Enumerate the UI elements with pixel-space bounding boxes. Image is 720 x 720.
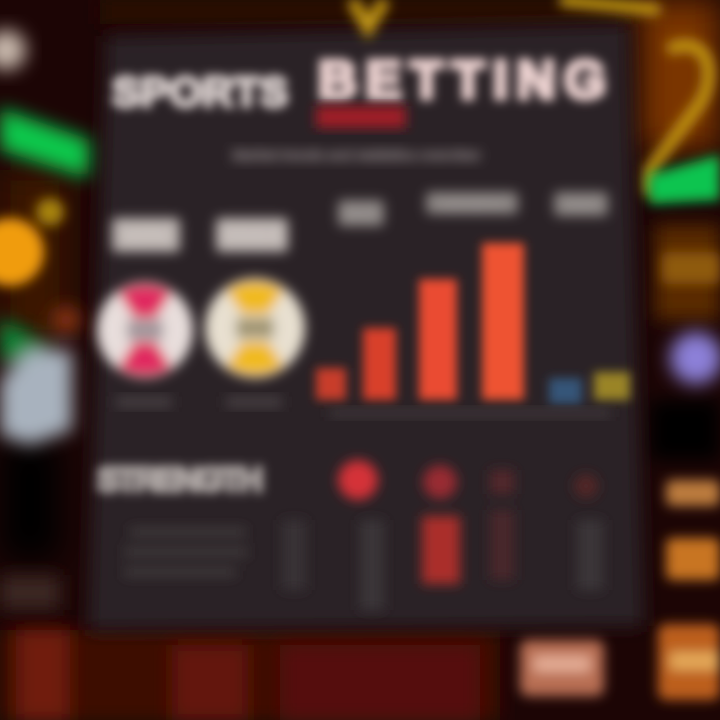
left decoration: green and white cluster xyxy=(0,306,80,445)
right decoration: green ribbon xyxy=(648,155,720,204)
section heading: STRENGTH xyxy=(97,461,263,499)
left decoration: white shape xyxy=(0,30,26,70)
title underline xyxy=(316,106,406,128)
column labels xyxy=(112,192,608,252)
column labels: GROWTH xyxy=(440,197,504,213)
right decoration: gold number xyxy=(352,0,709,195)
table indicators xyxy=(338,460,598,584)
donut chart: pink xyxy=(97,282,193,378)
left decoration: green ribbon xyxy=(0,108,90,178)
donut chart: yellow xyxy=(205,278,305,378)
title: BETTING xyxy=(318,50,606,110)
bar chart xyxy=(316,243,630,404)
panel: infographic board xyxy=(88,24,644,630)
title: SPORTS xyxy=(112,68,288,115)
title xyxy=(112,50,606,115)
bottom decoration: red columns xyxy=(16,630,480,720)
column labels: ODDS xyxy=(217,223,287,250)
right decoration: gold text xyxy=(662,252,720,284)
column labels: WIN xyxy=(123,223,169,250)
subtitle: Market trends and statistics overview xyxy=(232,147,480,164)
left decoration: gold coin xyxy=(0,198,64,286)
bottom decoration: orange box xyxy=(658,624,720,700)
right decoration: purple circle xyxy=(670,332,720,384)
column labels: 2021 xyxy=(343,207,379,224)
right decoration: orange labels xyxy=(666,480,720,580)
table text block xyxy=(124,520,603,610)
donut captions xyxy=(116,396,282,408)
column labels: 2024 xyxy=(565,197,597,213)
bottom decoration: peach box xyxy=(520,640,604,696)
bar axis labels xyxy=(330,408,610,418)
